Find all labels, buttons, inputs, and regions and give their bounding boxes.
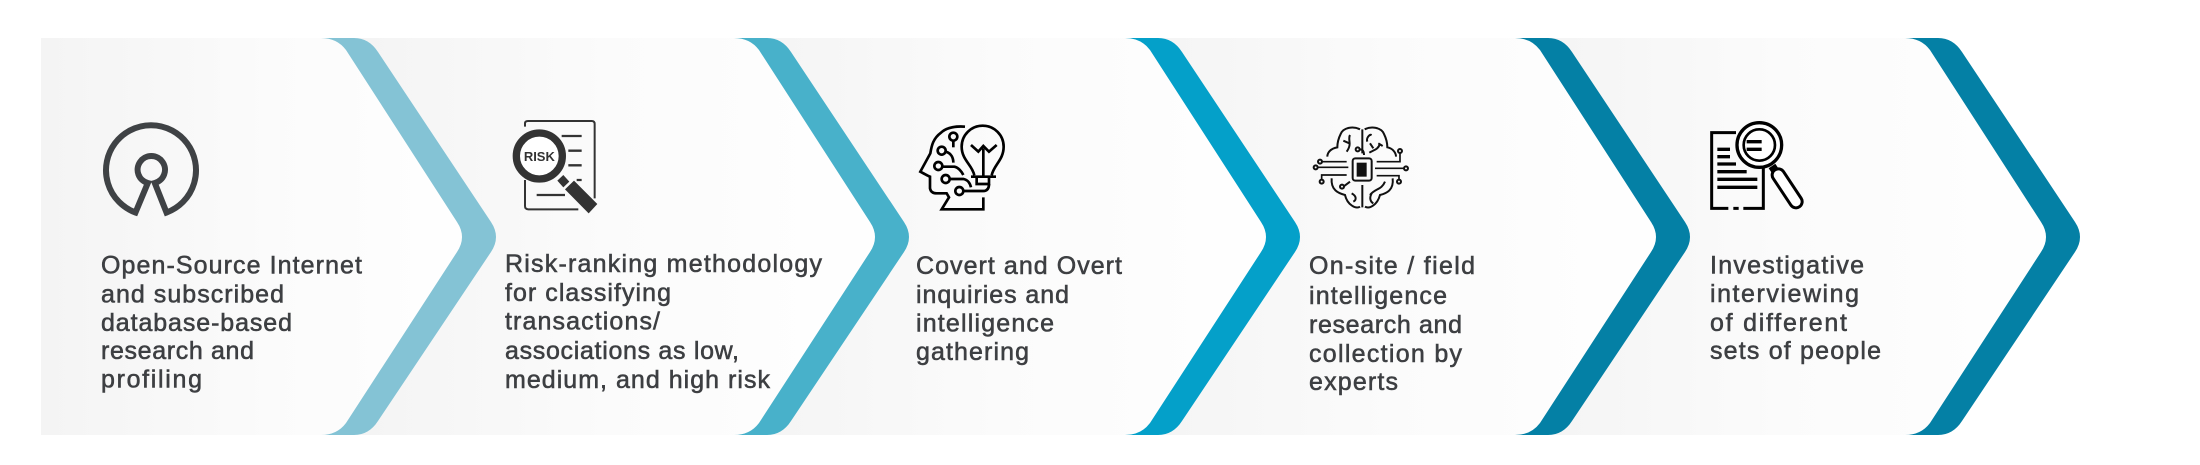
text: step 5 [1710,252,1881,365]
panel: step 4 on-site field intelligence [1140,38,1690,435]
text: step 1: Open-Source Internet [101,252,362,280]
icon: document with magnifier [1712,123,1796,208]
text: step 4: On-site / field [1309,252,1475,280]
text: step 2 [505,250,822,394]
text: step 4: research and [1309,311,1462,339]
text: step 1 [101,252,362,394]
text: step 5: of different [1710,309,1847,337]
text: step 1: database-based [101,309,292,337]
icon: head with light bulb [920,126,1004,209]
text: step 2: for classifying [505,279,671,307]
chevron 2 [734,38,909,435]
chevron 5 [1905,38,2080,435]
chevron 4 [1515,38,1690,435]
text: step 5: Investigative [1710,252,1864,280]
icon: risk document with magnifier [516,121,597,213]
chevron 1 [321,38,496,435]
icon: risk document with magnifier: RISK [524,149,555,164]
text: step 2: medium, and high risk [505,366,770,394]
text: step 1: and subscribed [101,280,284,308]
text: step 5: interviewing [1710,280,1859,308]
text: step 4: experts [1309,368,1398,396]
text: step 4: collection by [1309,340,1462,368]
panel: step 5 investigative interviewing [1530,38,2080,435]
text: step 2: Risk-ranking methodology [505,250,822,278]
text: step 4: intelligence [1309,282,1447,310]
text: step 1: research and [101,337,254,365]
text: step 1: profiling [101,366,202,394]
icon: brain with circuit chip [1314,128,1408,207]
text: step 3 [916,252,1122,366]
panel: step 1 open-source research [41,38,496,435]
text: step 4 [1309,252,1475,396]
chevron 3 [1125,38,1300,435]
panel: step 2 risk-ranking methodology [340,38,909,435]
icon: open source logo [106,125,196,212]
text: step 3: gathering [916,338,1029,366]
panel: step 3 covert and overt inquiries [750,38,1300,435]
text: step 3: inquiries and [916,281,1069,309]
text: step 3: Covert and Overt [916,252,1122,280]
text: step 3: intelligence [916,310,1054,338]
text: step 2: transactions/ [505,308,660,336]
text: step 2: associations as low, [505,337,739,365]
text: step 5: sets of people [1710,337,1881,365]
